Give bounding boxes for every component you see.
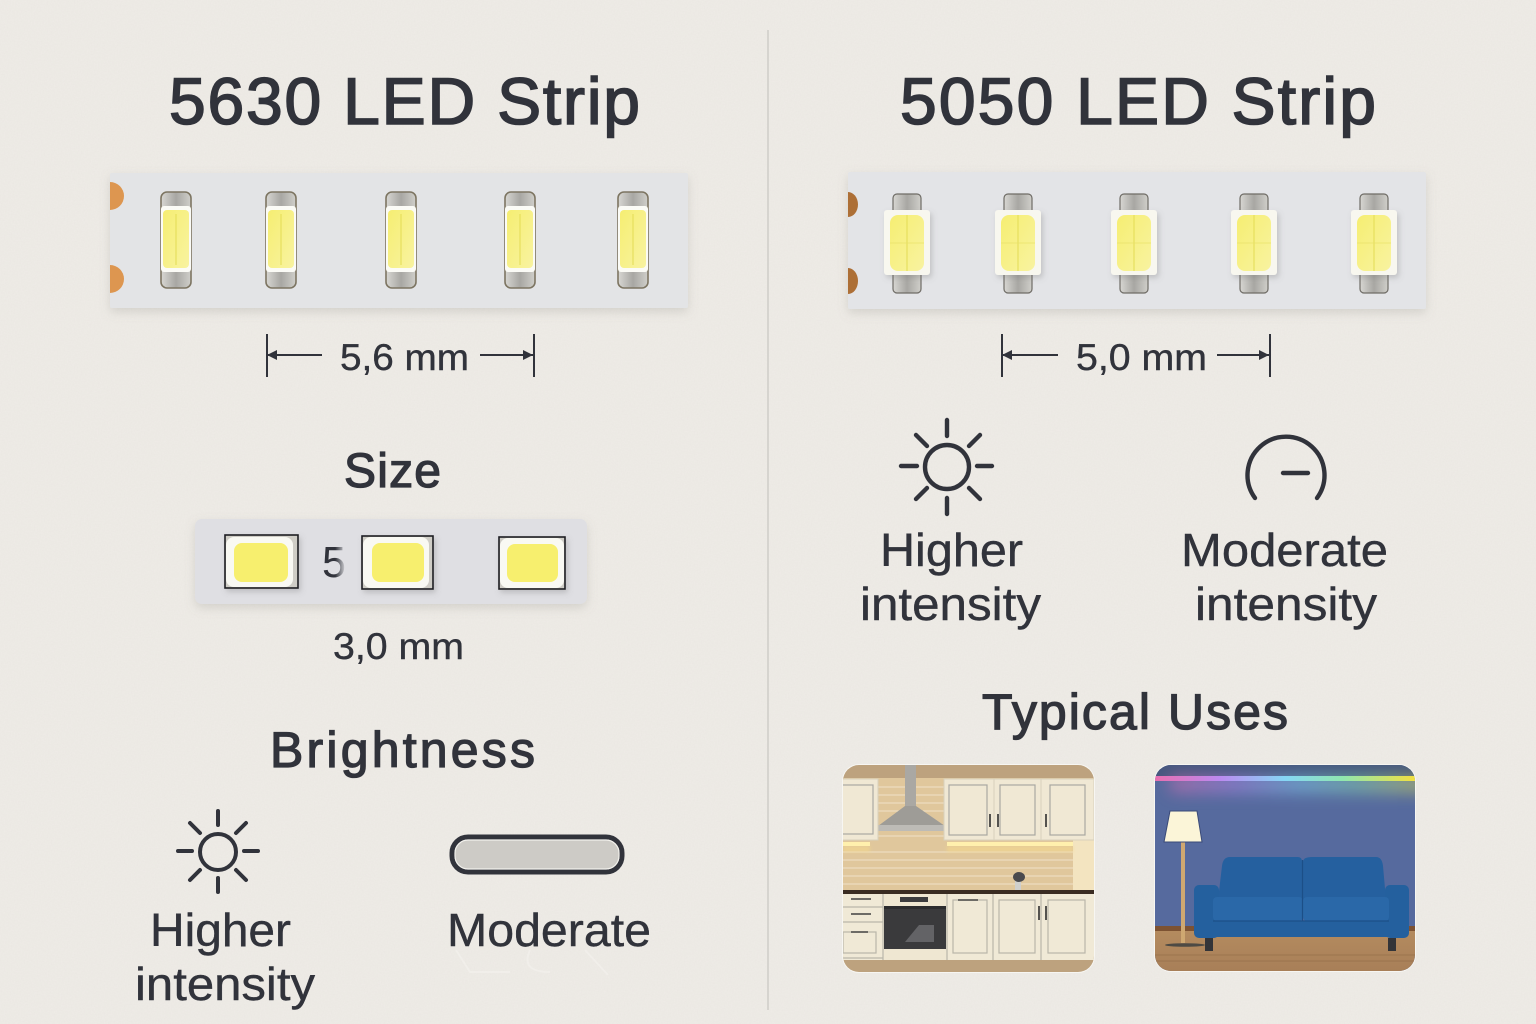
panel: 5050 LED strip <box>835 64 1430 973</box>
oven <box>884 897 946 949</box>
label: moderate intensity <box>1181 524 1388 630</box>
heading: Size: Size <box>344 445 441 498</box>
label: higher intensity: Higher <box>880 524 1023 576</box>
label: moderate: Moderate <box>447 904 651 956</box>
LED chips <box>884 194 1397 293</box>
title: 5050 LED Strip: 5050 LED Strip <box>900 64 1376 138</box>
illustration: living room <box>1154 764 1430 972</box>
label: moderate intensity: Moderate <box>1181 524 1388 576</box>
upper cabinets <box>835 779 1094 840</box>
label: higher intensity: intensity <box>860 578 1041 630</box>
size LED 1 <box>225 535 298 588</box>
faucet <box>1013 872 1025 891</box>
lower cabinets <box>843 894 1094 960</box>
dimension: 5,0 mm: 5,0 mm <box>1076 337 1207 378</box>
floor <box>1155 926 1415 971</box>
label: higher intensity: Higher <box>150 904 291 956</box>
icon: sun <box>178 811 258 892</box>
size LED 2 <box>362 536 433 589</box>
strip photo: 5050 <box>848 172 1426 309</box>
icon: moderate gauge <box>1248 437 1324 498</box>
dimension: 3,0 mm: 3,0 mm <box>333 626 464 667</box>
size label fragment: 5 <box>322 538 346 587</box>
under-cabinet light <box>843 842 1073 852</box>
heading: Typical Uses: Typical Uses <box>982 684 1288 740</box>
floor lamp <box>1164 811 1202 943</box>
title: 5630 LED Strip: 5630 LED Strip <box>169 64 640 138</box>
rainbow light strip <box>1155 776 1430 792</box>
LED chips <box>161 192 648 288</box>
countertop <box>843 890 1094 894</box>
icon: moderate bar <box>452 837 622 872</box>
label: higher intensity: intensity <box>135 958 315 1010</box>
strip photo: 5630 <box>110 173 688 308</box>
size strip <box>195 519 587 604</box>
dimension: 5,6 mm: 5,6 mm <box>340 337 469 378</box>
label: moderate intensity: intensity <box>1195 578 1377 630</box>
icon: sun <box>901 420 992 514</box>
label: higher intensity <box>860 524 1041 630</box>
illustration: kitchen <box>835 764 1095 973</box>
sofa <box>1194 857 1409 951</box>
label: higher intensity <box>135 904 315 1010</box>
size LED 3 <box>499 537 565 589</box>
hood <box>878 765 945 831</box>
panel: 5630 LED strip <box>110 64 688 1010</box>
heading: Brightness: Brightness <box>270 722 535 778</box>
